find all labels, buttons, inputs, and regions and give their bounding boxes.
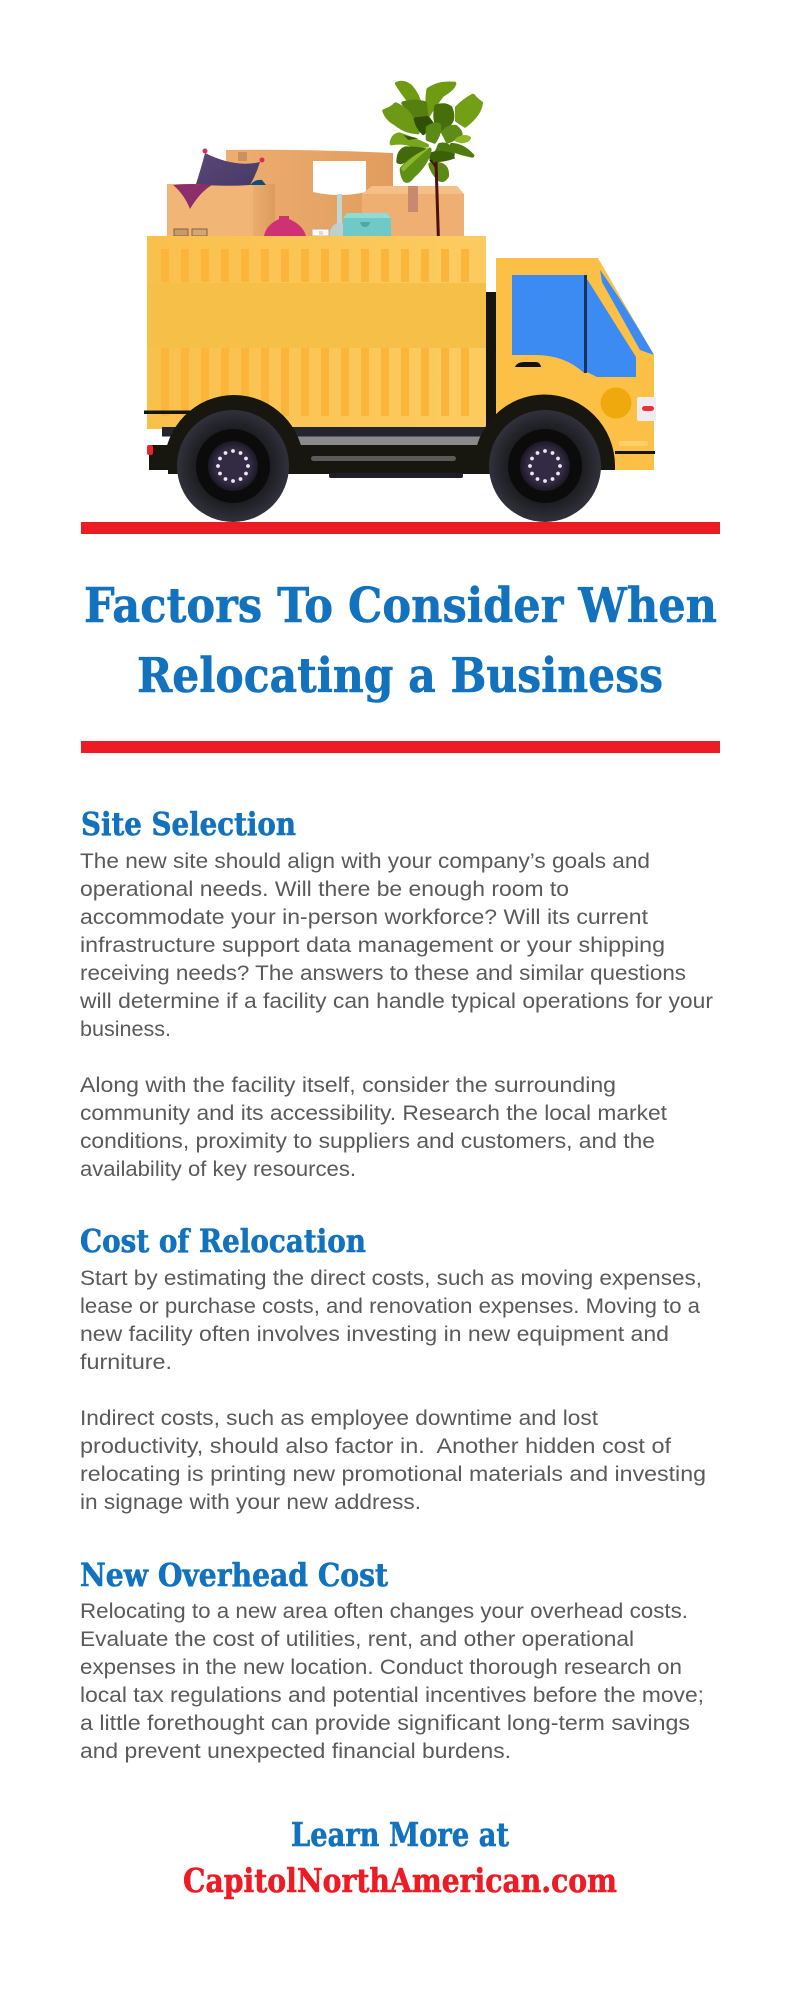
section: cost of relocation [80, 1222, 706, 1514]
body text: new overhead cost [80, 1600, 704, 1763]
body text: cost of relocation: relocating is printing new promotional materials and investing [80, 1463, 706, 1486]
plant [384, 83, 481, 236]
headlight [600, 388, 632, 418]
body text: site selection: will determine if a facility can handle typical operations for your [79, 990, 713, 1013]
body text: new overhead cost: and prevent unexpected financial burdens. [80, 1740, 511, 1763]
illustration: moving truck with boxes and plant [144, 83, 656, 522]
cargo: boxes, lamp and pillow [167, 148, 464, 236]
body text: site selection: Along with the facility itself, consider the surrounding [80, 1074, 616, 1097]
body text: new overhead cost: local tax regulations and potential incentives before the move; [80, 1684, 704, 1707]
bottom red divider [81, 741, 720, 753]
body text: site selection: availability of key resources. [80, 1158, 356, 1181]
body text: site selection: conditions, proximity to suppliers and customers, and the [80, 1130, 655, 1153]
heading: cost of relocation: Cost of Relocation [80, 1222, 366, 1260]
body text: cost of relocation: lease or purchase costs, and renovation expenses. Moving to a [80, 1295, 700, 1318]
body text: cost of relocation [80, 1267, 706, 1514]
section: new overhead cost [80, 1556, 704, 1763]
body text: new overhead cost: expenses in the new location. Conduct thorough research on [80, 1656, 682, 1679]
body text: site selection: accommodate your in-person workforce? Will its current [80, 906, 648, 929]
body text: cost of relocation: new facility often involves investing in new equipment and [80, 1323, 669, 1346]
truck cab [496, 258, 656, 470]
rear wheel [164, 395, 304, 522]
body text: site selection: The new site should align with your company’s goals and [80, 850, 650, 873]
heading: site selection: Site Selection [81, 805, 296, 843]
body text: site selection [79, 850, 713, 1181]
front wheel [474, 394, 615, 522]
title: Relocating a Business [137, 648, 663, 704]
body text: new overhead cost: Evaluate the cost of utilities, rent, and other operational [80, 1628, 634, 1651]
title: Factors To Consider When [84, 578, 717, 634]
body text: cost of relocation: in signage with your new address. [80, 1491, 421, 1514]
body text: cost of relocation: furniture. [80, 1351, 172, 1374]
learn more line: Learn More at [291, 1815, 510, 1854]
body text: cost of relocation: productivity, should also factor in. Another hidden cost of [80, 1435, 671, 1458]
title [84, 578, 717, 704]
body text: site selection: business. [80, 1018, 171, 1041]
heading: new overhead cost: New Overhead Cost [80, 1556, 388, 1594]
body text: new overhead cost: a little forethought can provide significant long-term savings [80, 1712, 690, 1735]
body text: site selection: receiving needs? The answers to these and similar questions [80, 962, 686, 985]
top red divider [81, 522, 720, 534]
body text: site selection: community and its accessibility. Research the local market [80, 1102, 667, 1125]
truck cargo container [144, 236, 496, 429]
website url: CapitolNorthAmerican.com [183, 1861, 617, 1900]
body text: site selection: operational needs. Will there be enough room to [80, 878, 569, 901]
body text: cost of relocation: Indirect costs, such as employee downtime and lost [80, 1407, 598, 1430]
section: site selection [79, 805, 713, 1181]
body text: site selection: infrastructure support data management or your shipping [80, 934, 665, 957]
body text: cost of relocation: Start by estimating the direct costs, such as moving expenses, [80, 1267, 702, 1290]
body text: new overhead cost: Relocating to a new area often changes your overhead costs. [80, 1600, 688, 1623]
truck chassis [147, 427, 499, 478]
call to action [183, 1815, 617, 1900]
